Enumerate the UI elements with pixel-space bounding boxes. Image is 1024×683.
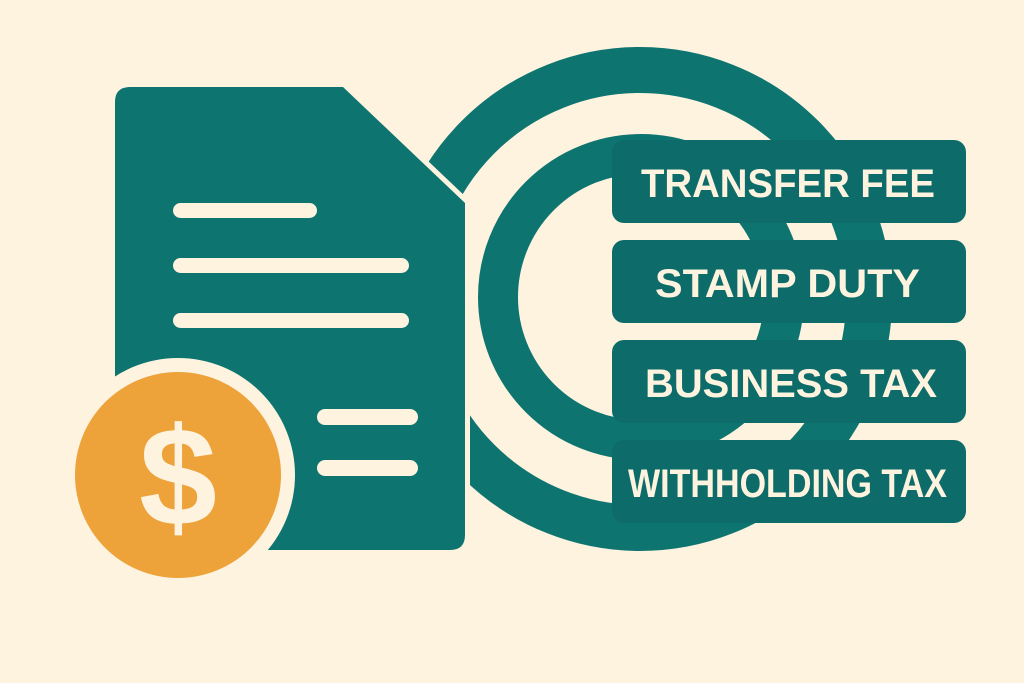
pill: stamp duty bbox=[612, 240, 966, 323]
pill: withholding tax: WITHHOLDING TAX bbox=[628, 462, 947, 506]
document icon bbox=[115, 87, 465, 550]
icon: dollar coin bbox=[61, 358, 295, 592]
pill: business tax: BUSINESS TAX bbox=[645, 362, 937, 406]
pill: business tax bbox=[612, 340, 966, 423]
pill: withholding tax bbox=[612, 440, 966, 523]
outer ring bbox=[411, 70, 869, 528]
inner ring bbox=[498, 154, 784, 440]
document text lines bbox=[173, 203, 418, 476]
pill: stamp duty: STAMP DUTY bbox=[655, 262, 920, 306]
pill: transfer fee: TRANSFER FEE bbox=[641, 162, 935, 206]
label pills bbox=[612, 140, 966, 523]
pill: transfer fee bbox=[612, 140, 966, 223]
icon: dollar coin: $ bbox=[139, 398, 217, 555]
